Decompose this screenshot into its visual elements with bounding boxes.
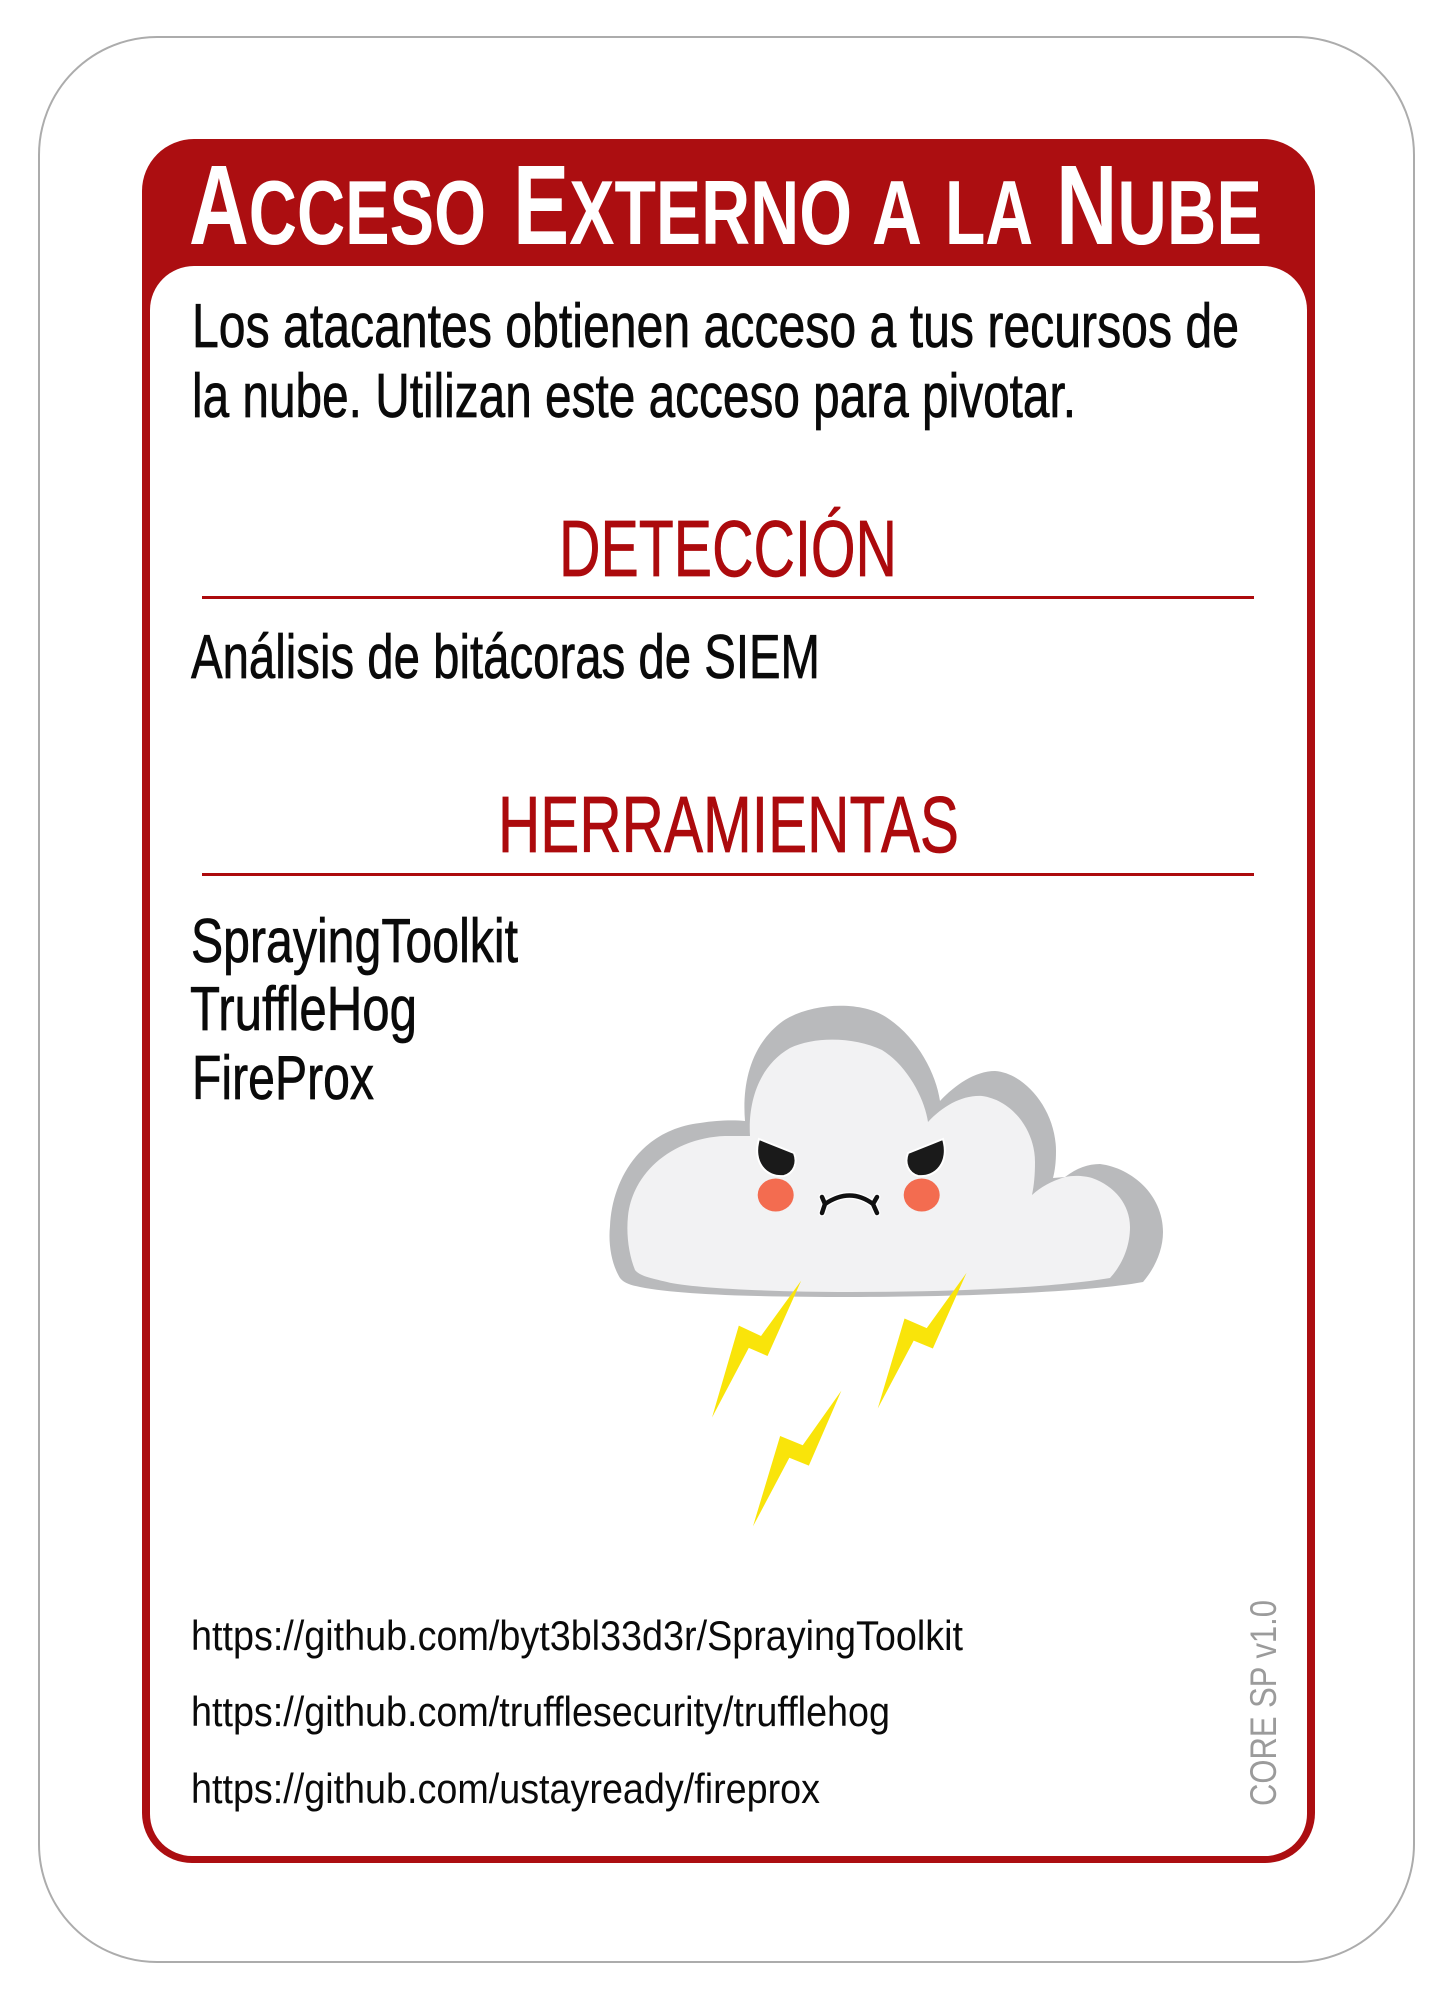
version label: CORE SP v1.0 (1243, 1600, 1284, 1806)
url list: https://github.com/ustayready/fireprox (191, 1765, 820, 1812)
lightning bolt right (878, 1273, 967, 1409)
url list: https://github.com/byt3bl33d3r/SprayingToolkit (191, 1612, 963, 1659)
title: LA (945, 163, 1033, 264)
panel: red card frame (142, 139, 1315, 1863)
lightning bolt bottom (753, 1391, 841, 1526)
title: ACCESO (189, 142, 486, 268)
left cheek (758, 1178, 794, 1212)
title: EXTERNO (513, 142, 852, 268)
right cheek (904, 1178, 940, 1212)
tool list: FireProx (192, 1044, 374, 1113)
tool list: SprayingToolkit (191, 907, 518, 976)
description text (192, 292, 1239, 431)
cloud body (627, 1040, 1130, 1292)
lightning bolt left (712, 1281, 801, 1417)
tool list: TruffleHog (190, 975, 417, 1044)
heading: herramientas: HERRAMIENTAS (498, 780, 959, 869)
url list: https://github.com/trufflesecurity/trufflehog (191, 1688, 890, 1735)
mouth (822, 1196, 877, 1213)
left eye (757, 1139, 796, 1176)
description text: la nube. Utilizan este acceso para pivotar. (192, 362, 1076, 431)
icon: angry storm cloud (609, 1006, 1163, 1526)
tool list (190, 907, 518, 1113)
panel: white card body (150, 266, 1307, 1856)
title (189, 142, 1262, 268)
right eye (906, 1139, 945, 1176)
title: NUBE (1056, 142, 1262, 268)
url list (191, 1612, 963, 1812)
heading: detección: DETECCIÓN (559, 504, 897, 593)
text: detection method: Análisis de bitácoras de SIEM (191, 623, 820, 692)
title: A (872, 163, 922, 264)
cloud shadow (609, 1006, 1163, 1297)
